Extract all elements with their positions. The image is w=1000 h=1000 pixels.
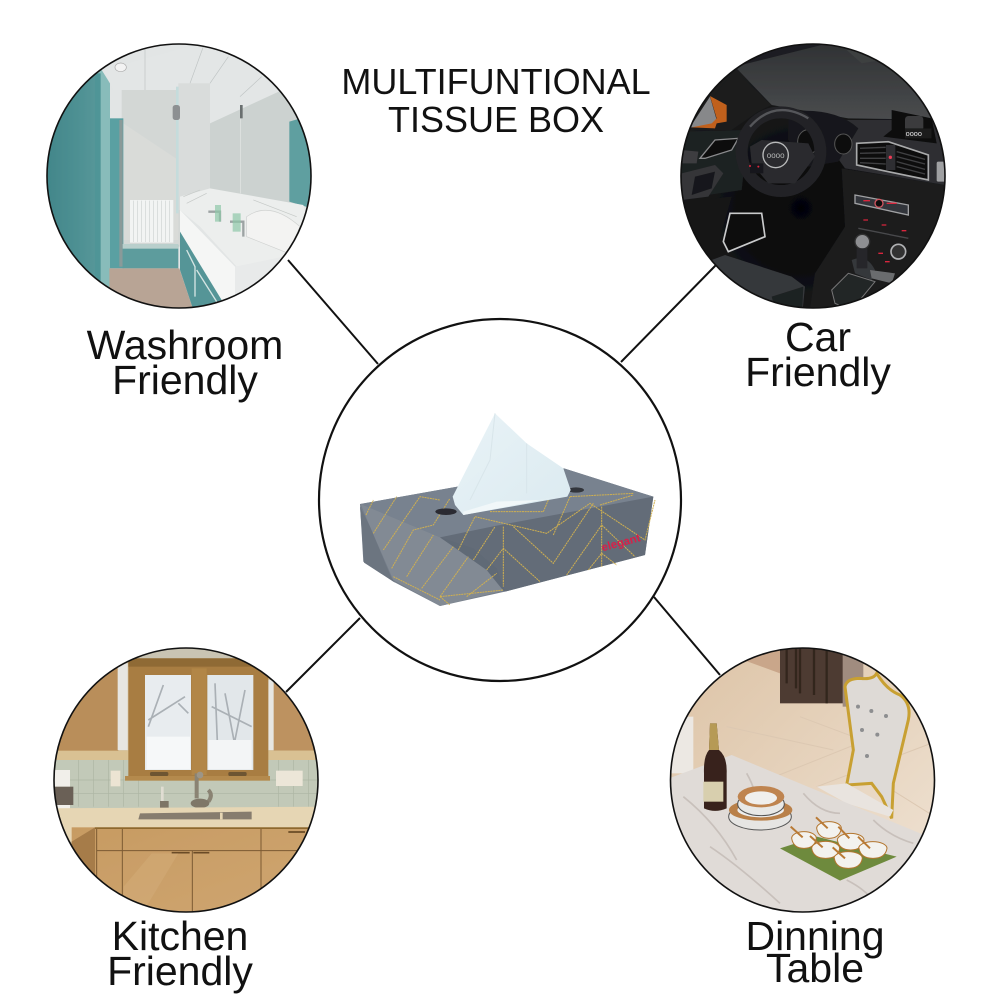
label: washroom friendly: Washroom xyxy=(87,322,283,368)
title: MULTIFUNTIONAL xyxy=(341,61,651,102)
logo text: elegant xyxy=(600,532,642,554)
label: kitchen friendly: Friendly xyxy=(107,948,253,994)
title xyxy=(341,61,651,140)
connector: dining to centre xyxy=(654,597,720,675)
label: dinning table xyxy=(745,913,885,991)
connector: kitchen to centre xyxy=(286,618,360,692)
label: washroom friendly: Friendly xyxy=(112,357,258,403)
label: dinning table: Dinning xyxy=(745,913,885,959)
label: kitchen friendly: Kitchen xyxy=(112,913,248,959)
connector: car to centre xyxy=(621,265,716,362)
label: kitchen friendly xyxy=(107,913,253,994)
connector: washroom to centre xyxy=(288,260,378,364)
photo circle: car interior: oooo xyxy=(906,129,922,138)
label: car friendly xyxy=(745,314,891,395)
title: TISSUE BOX xyxy=(388,99,604,140)
photo circle: washroom xyxy=(40,40,320,320)
photo circle: kitchen xyxy=(53,647,319,913)
photo circle: dining table xyxy=(660,640,940,920)
centre circle with tissue box xyxy=(319,319,681,681)
label: car friendly: Car xyxy=(785,314,851,360)
label: car friendly: Friendly xyxy=(745,349,891,395)
photo circle: car interior: oooo xyxy=(767,151,785,160)
label: dinning table: Table xyxy=(766,945,864,991)
icon: tissue box xyxy=(360,413,655,606)
label: washroom friendly xyxy=(87,322,283,403)
photo circle: car interior xyxy=(675,40,955,320)
